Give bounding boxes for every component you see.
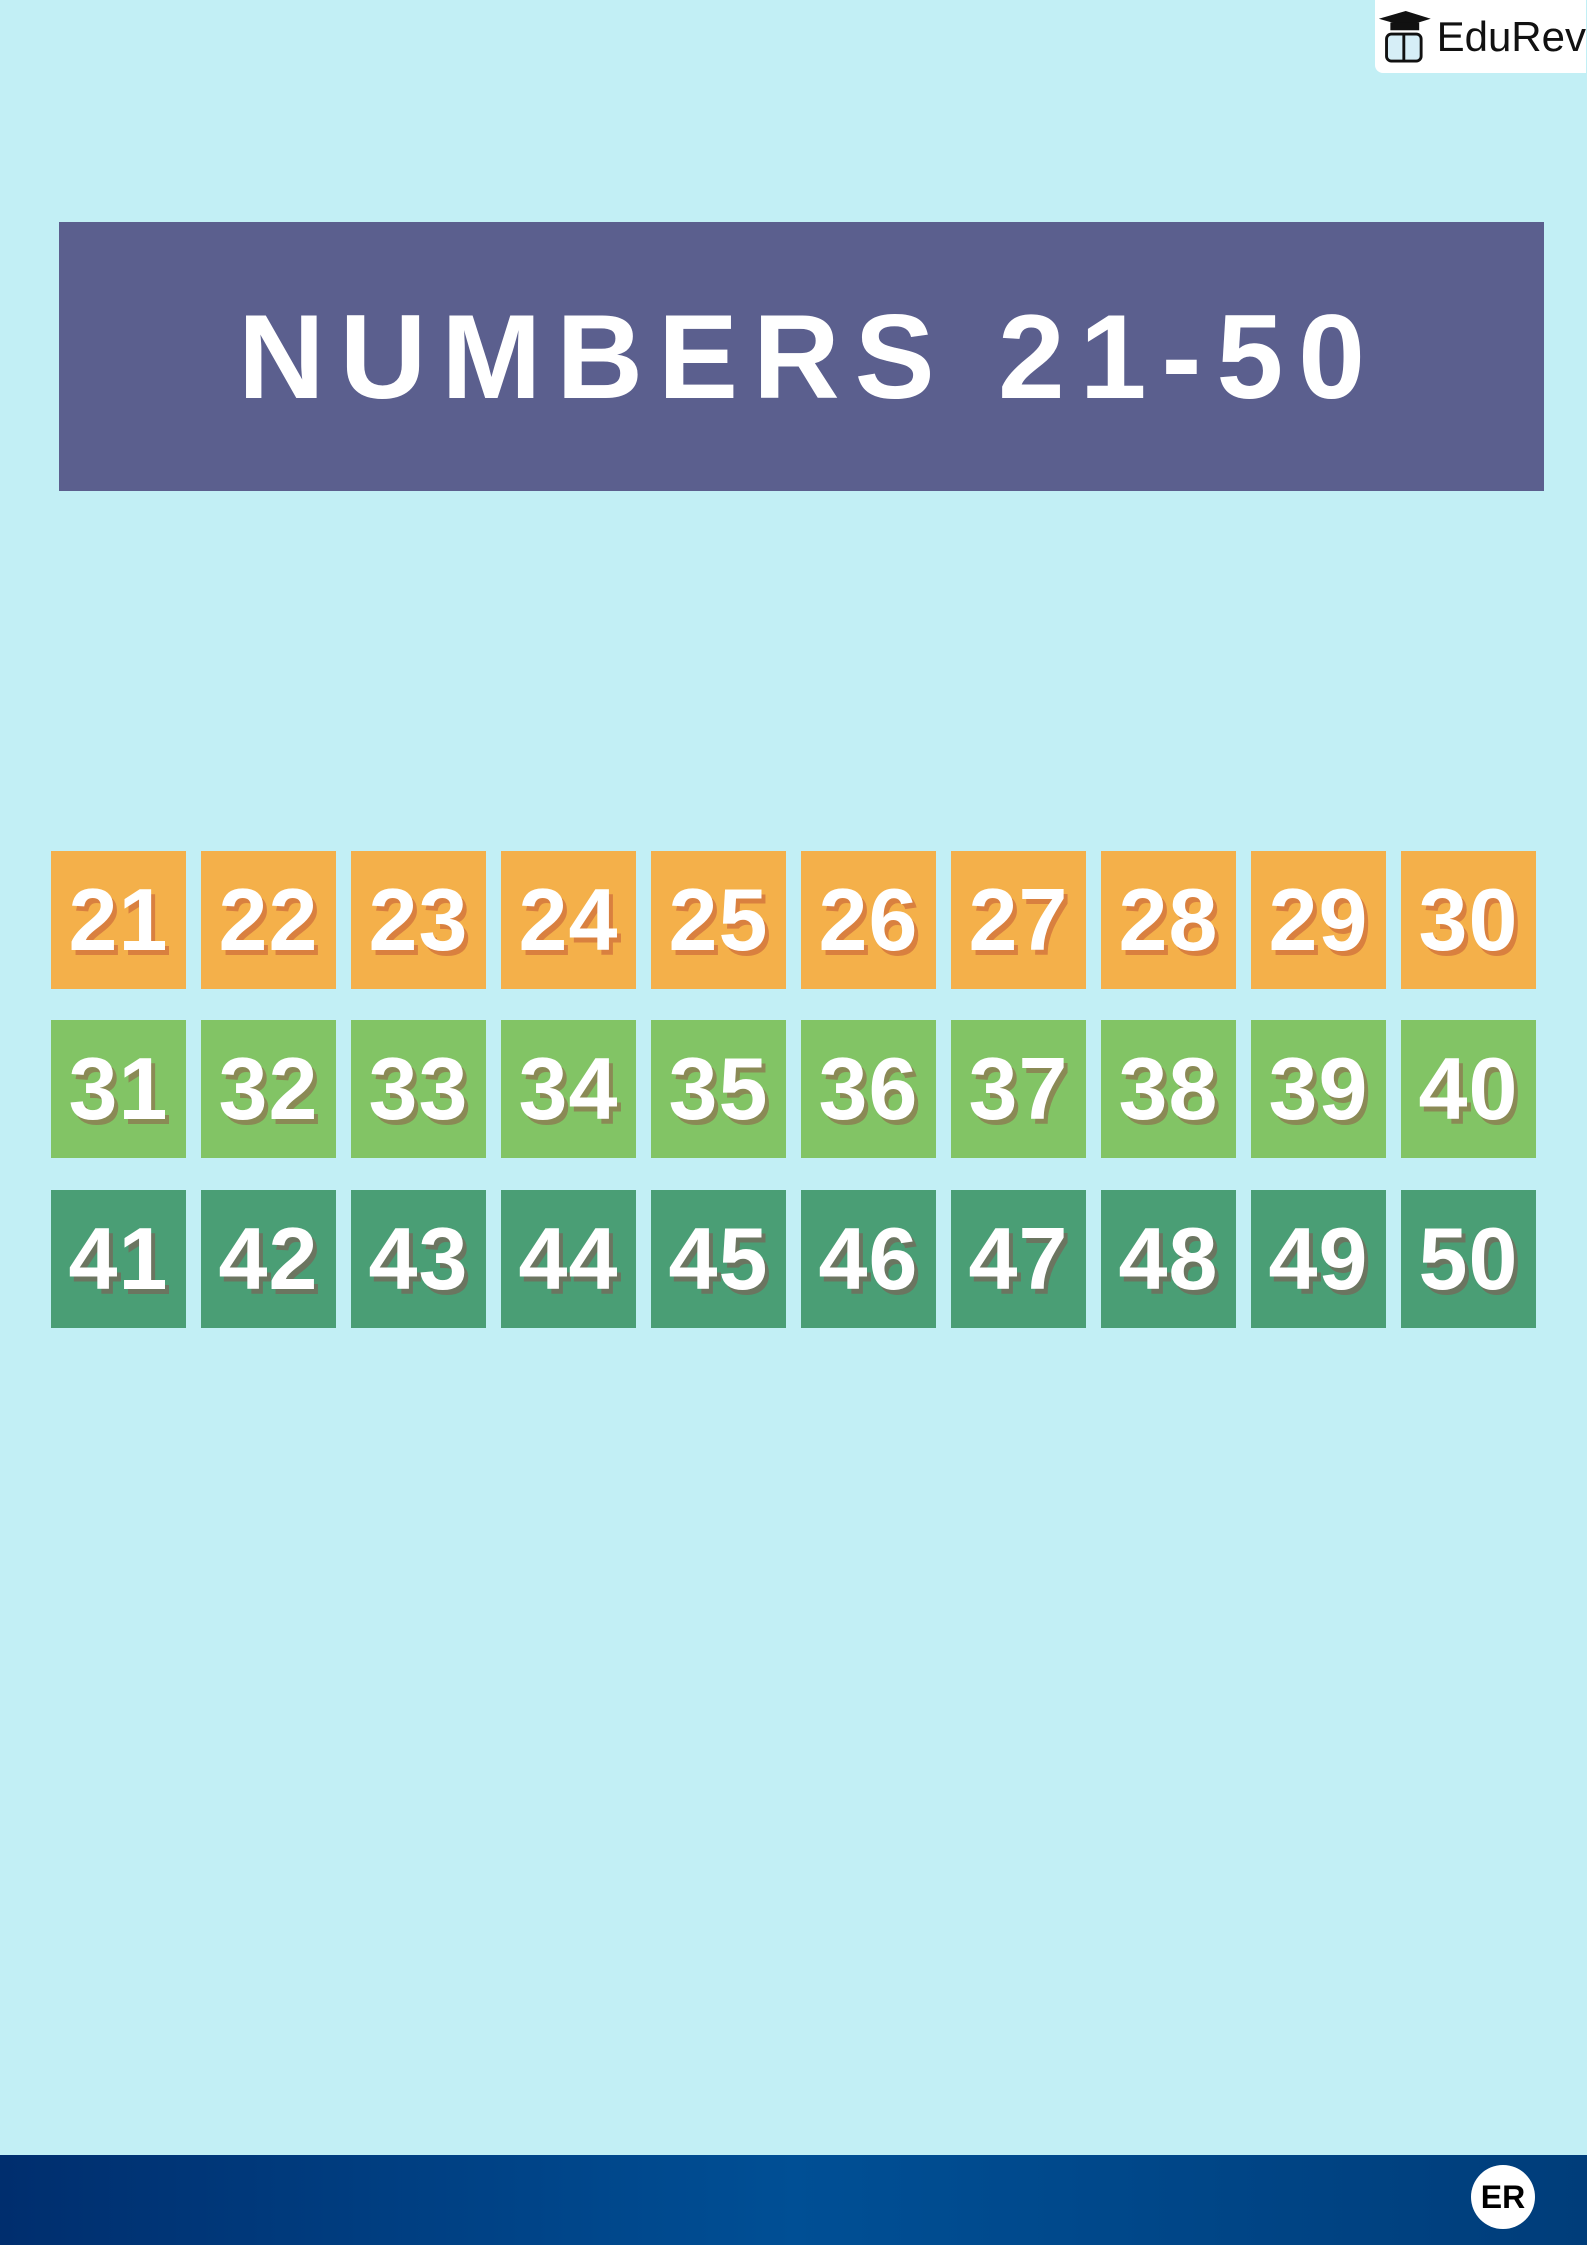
number grid: 30 — [1419, 870, 1518, 969]
icon: ER badge — [1471, 2165, 1535, 2229]
number grid: 50 — [1419, 1209, 1518, 1308]
number grid: 35 — [669, 1039, 768, 1138]
number grid: 23 — [369, 870, 468, 969]
number grid: 25 — [669, 870, 768, 969]
number grid: 37 — [969, 1039, 1068, 1138]
number grid: 45 — [669, 1209, 768, 1308]
footer bar — [0, 2155, 1587, 2245]
number grid: 34 — [519, 1039, 618, 1138]
number grid: 48 — [1119, 1209, 1218, 1308]
number grid: 21 — [69, 870, 168, 969]
number grid: 43 — [369, 1209, 468, 1308]
title banner — [59, 222, 1544, 491]
number grid: 32 — [219, 1039, 318, 1138]
number grid: 41 — [69, 1209, 168, 1308]
number grid: 28 — [1119, 870, 1218, 969]
number grid: 36 — [819, 1039, 918, 1138]
number grid: 47 — [969, 1209, 1068, 1308]
number grid: 22 — [219, 870, 318, 969]
number grid — [51, 851, 1536, 1328]
number grid: 49 — [1269, 1209, 1368, 1308]
number grid: 40 — [1419, 1039, 1518, 1138]
number grid: 42 — [219, 1209, 318, 1308]
logo: EduRev: EduRev — [1437, 12, 1586, 60]
number grid: 29 — [1269, 870, 1368, 969]
number grid: 38 — [1119, 1039, 1218, 1138]
number grid: 26 — [819, 870, 918, 969]
number grid: 46 — [819, 1209, 918, 1308]
icon: ER badge: ER — [1481, 2178, 1525, 2214]
number grid: 27 — [969, 870, 1068, 969]
number grid: 31 — [69, 1039, 168, 1138]
logo: EduRev — [1375, 0, 1586, 73]
number grid: 44 — [519, 1209, 618, 1308]
number grid: 24 — [519, 870, 618, 969]
title banner: NUMBERS 21-50 — [238, 290, 1380, 424]
number grid: 33 — [369, 1039, 468, 1138]
number grid: 39 — [1269, 1039, 1368, 1138]
